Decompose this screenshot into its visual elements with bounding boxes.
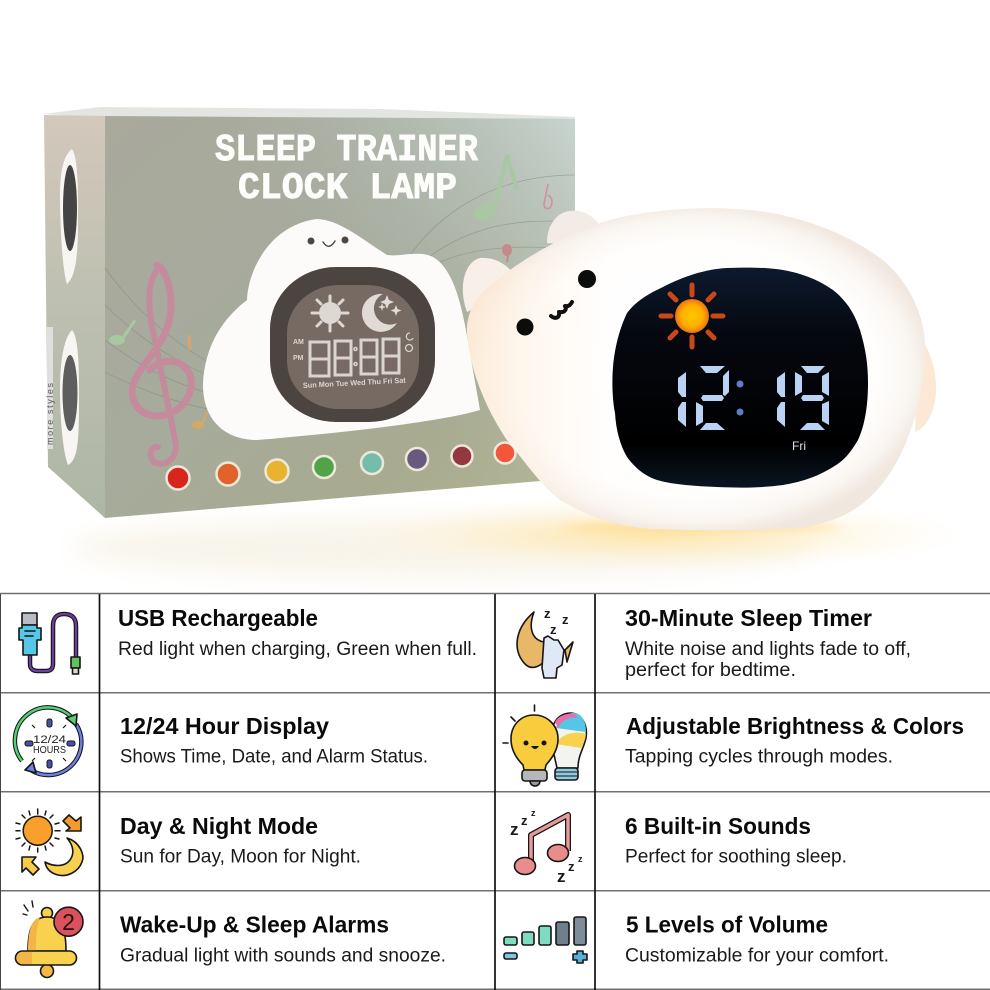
description: White noise and lights fade to off, [625,639,911,660]
box cloud clock illustration [203,219,480,440]
day label: Fri [792,439,806,453]
display sun [312,296,348,331]
cloud face [308,236,348,246]
box top flap [43,107,575,121]
icon: moon with zzz [517,606,573,678]
heading: 6 Built-in Sounds [625,813,811,839]
icon: moon with zzz: z [562,612,569,627]
time digits 12:19 [678,366,829,430]
icon: USB cable [19,613,80,674]
display AM PM [293,339,304,362]
lamp body [467,208,925,530]
table grid [0,594,990,990]
description: perfect for bedtime. [625,660,796,681]
icon: clock [15,707,83,776]
feature: volume levels [504,912,889,967]
clock inner display [287,285,419,409]
heading: Wake-Up & Sleep Alarms [120,912,389,938]
icon: music note with zzz: z [521,813,528,828]
lamp top ear [547,211,600,245]
icon: smiling bulbs [503,705,586,786]
icon: music note with zzz [510,808,583,886]
heading: Day & Night Mode [120,813,318,839]
box title: SLEEP TRAINER [215,129,478,172]
lamp left ear [463,258,512,312]
description [625,639,911,681]
description: Gradual light with sounds and snooze. [120,946,446,967]
description: Tapping cycles through modes. [625,747,893,768]
box title: CLOCK LAMP [238,168,457,210]
heading: Adjustable Brightness & Colors [626,713,964,739]
box title [215,129,478,210]
clock outer frame [270,267,435,422]
staff lines [105,175,575,412]
icon: volume bars [504,917,587,963]
icon: music note with zzz: z [531,808,536,818]
colon dots [736,380,744,416]
heading: 12/24 Hour Display [120,713,329,739]
sun icon on screen [661,285,723,347]
display AM PM: PM [293,355,304,362]
description: Red light when charging, Green when full. [118,639,477,660]
side face label [45,327,55,449]
treble clef [132,265,191,464]
heading: 30-Minute Sleep Timer [625,605,872,631]
display digits 88:88 [310,339,399,376]
box left side face [44,115,105,518]
feature: day and night mode [16,809,361,875]
description: Shows Time, Date, and Alarm Status. [120,747,428,768]
description: Customizable for your comfort. [625,946,889,967]
lamp mouth [551,302,572,318]
icon: music note with zzz: z [557,867,566,886]
feature: sleep timer [517,605,911,681]
icon: music note with zzz: z [568,859,575,874]
icon: moon with zzz: z [550,622,557,637]
feature: 12/24 hour display [15,707,428,776]
cloud body [203,219,480,440]
feature table [0,594,990,990]
feature: alarms [16,901,446,978]
box front face [105,116,575,518]
lamp back ear [915,335,936,432]
heading: USB Rechargeable [118,605,318,631]
icon: music note with zzz: z [510,820,518,839]
icon: sun moon swap [16,809,83,875]
icon: clock: HOURS [33,744,66,756]
lamp eyes [516,270,596,336]
icon: clock: 12/24 [33,734,66,746]
feature: USB rechargeable [19,605,477,674]
icon: moon with zzz: z [544,606,551,621]
side face label: more styles [45,382,55,445]
lamp warm shade [467,228,612,522]
display weekdays: Sun Mon Tue Wed Thu Fri Sat [303,376,406,390]
floor glow and shadow [70,497,970,576]
display AM PM: AM [293,339,304,346]
product box [43,107,575,518]
feature: built-in sounds [510,808,847,886]
side face cloud thumbnails [60,149,79,465]
icon: bell with badge: 2 [62,909,75,935]
icon: bell with badge [16,901,83,978]
colour dots [166,442,516,490]
icon: music note with zzz: z [578,854,583,864]
cat lamp [463,208,936,530]
lamp screen [612,268,868,488]
display moon [362,294,402,332]
music notes [109,155,552,429]
feature: brightness and colors [503,705,964,786]
description: Perfect for soothing sleep. [625,847,847,868]
description: Sun for Day, Moon for Night. [120,847,361,868]
heading: 5 Levels of Volume [626,912,828,938]
display status icons [406,333,413,352]
